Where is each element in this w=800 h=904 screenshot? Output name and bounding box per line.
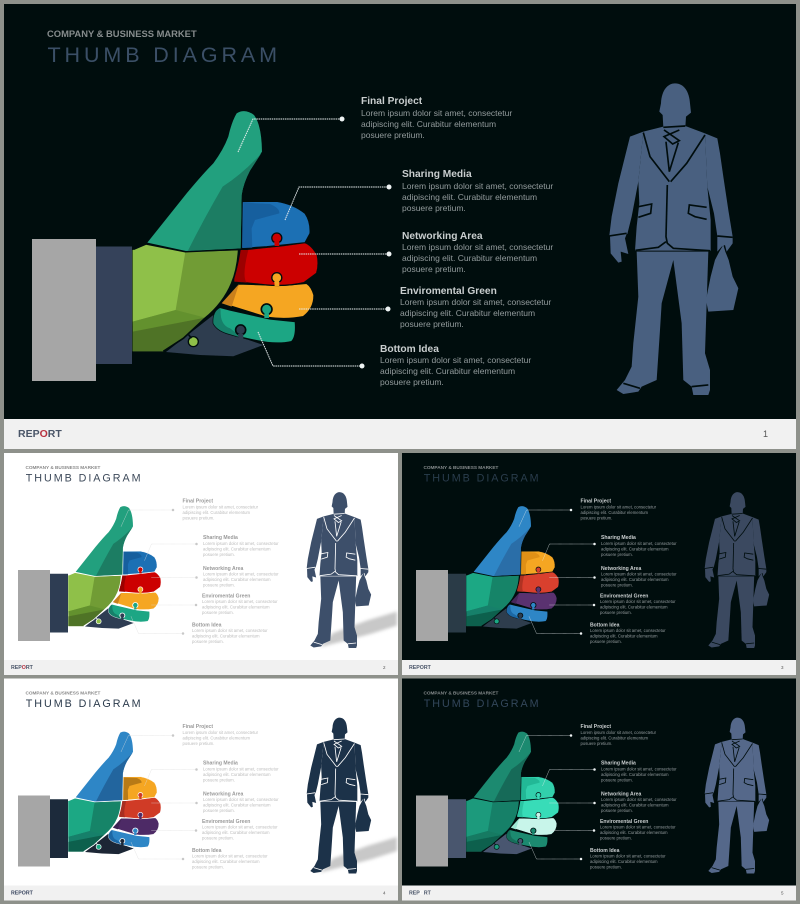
footer bar bbox=[4, 886, 398, 900]
callouts: posuere pretium. bbox=[203, 778, 235, 782]
businessman silhouette bbox=[705, 718, 769, 873]
callouts: Enviromental Green bbox=[600, 819, 648, 825]
callouts: adipiscing elit. Curabitur elementum bbox=[192, 634, 260, 638]
businessman silhouette bbox=[705, 492, 769, 648]
callouts: Lorem ipsum dolor sit amet, consectetur bbox=[203, 766, 279, 772]
icon: thumbs-up hand bbox=[18, 506, 161, 641]
callouts: Lorem ipsum dolor sit amet, consectetur bbox=[202, 599, 278, 604]
callouts: Lorem ipsum dolor sit amet, consectetur bbox=[192, 628, 268, 633]
callouts: adipiscing elit. Curabitur elementum bbox=[192, 859, 260, 864]
callout: enviromental green bbox=[299, 286, 551, 329]
callout: networking area: Lorem ipsum dolor sit amet, consectetur bbox=[402, 242, 553, 252]
callout: bottom idea bbox=[258, 332, 531, 387]
callouts: Bottom Idea bbox=[192, 848, 222, 854]
callouts: adipiscing elit. Curabitur elementum bbox=[580, 736, 649, 740]
callouts: Lorem ipsum dolor sit amet, consectetur bbox=[590, 628, 666, 633]
callouts: adipiscing elit. Curabitur elementum bbox=[601, 546, 669, 552]
businessman silhouette bbox=[307, 492, 371, 648]
callouts: Networking Area bbox=[601, 792, 641, 798]
callouts: adipiscing elit. Curabitur elementum bbox=[600, 604, 668, 610]
callout: final project: adipiscing elit. Curabitur elementum bbox=[361, 119, 496, 129]
callout: networking area: posuere pretium. bbox=[402, 264, 466, 274]
callout: bottom idea: Bottom Idea bbox=[380, 344, 439, 355]
callouts: Lorem ipsum dolor sit amet, consectetur bbox=[580, 504, 657, 510]
callouts bbox=[519, 498, 677, 644]
callouts: Final Project bbox=[182, 498, 213, 504]
callouts bbox=[519, 724, 677, 870]
callouts: posuere pretium. bbox=[601, 552, 633, 557]
icon: thumbs-up hand bbox=[416, 732, 559, 866]
callout: enviromental green: Lorem ipsum dolor sit amet, consectetur bbox=[400, 297, 551, 307]
title block: COMPANY & BUSINESS MARKET bbox=[47, 28, 197, 39]
panel: slide 5 dark bbox=[402, 678, 796, 900]
callout: bottom idea: posuere pretium. bbox=[380, 377, 444, 387]
callout: networking area: Networking Area bbox=[402, 231, 483, 242]
callout: bottom idea: adipiscing elit. Curabitur elementum bbox=[380, 366, 515, 376]
icon: thumbs-up hand bbox=[18, 732, 161, 866]
thumb bbox=[147, 111, 262, 251]
title block: THUMB DIAGRAM bbox=[424, 472, 540, 484]
callouts: Lorem ipsum dolor sit amet, consectetur bbox=[600, 599, 676, 604]
callouts: adipiscing elit. Curabitur elementum bbox=[601, 577, 669, 582]
callouts: posuere pretium. bbox=[203, 808, 235, 813]
callouts: Lorem ipsum dolor sit amet, consectetur bbox=[601, 541, 677, 546]
callout: networking area bbox=[299, 231, 553, 274]
footer bar: REPORT bbox=[409, 665, 432, 671]
callouts: Lorem ipsum dolor sit amet, consectetur bbox=[202, 824, 278, 830]
title block bbox=[26, 690, 142, 710]
callouts: Enviromental Green bbox=[600, 594, 648, 600]
callouts: adipiscing elit. Curabitur elementum bbox=[590, 634, 658, 638]
icon: thumbs-up hand bbox=[32, 111, 318, 381]
callouts: posuere pretium. bbox=[192, 864, 224, 870]
callouts: adipiscing elit. Curabitur elementum bbox=[580, 510, 649, 515]
callouts: posuere pretium. bbox=[600, 610, 632, 615]
footer bar: 3 bbox=[781, 665, 784, 670]
callouts: adipiscing elit. Curabitur elementum bbox=[202, 830, 270, 835]
callouts: posuere pretium. bbox=[203, 582, 235, 588]
callouts: posuere pretium. bbox=[203, 552, 235, 557]
panel: main slide bbox=[4, 4, 796, 449]
footer bar: 5 bbox=[781, 890, 784, 896]
callouts: posuere pretium. bbox=[580, 516, 612, 520]
callouts: Lorem ipsum dolor sit amet, consectetur bbox=[182, 504, 259, 510]
callouts: posuere pretium. bbox=[182, 741, 214, 746]
puzzle knob bbox=[188, 335, 198, 347]
callout: final project bbox=[238, 96, 512, 152]
footer bar bbox=[4, 419, 796, 449]
callout: bottom idea: Lorem ipsum dolor sit amet, consectetur bbox=[380, 355, 531, 365]
callout: enviromental green: posuere pretium. bbox=[400, 319, 464, 329]
callouts: Bottom Idea bbox=[590, 848, 620, 854]
callouts: Sharing Media bbox=[601, 760, 636, 766]
callouts: posuere pretium. bbox=[182, 516, 214, 520]
callouts: posuere pretium. bbox=[590, 864, 622, 870]
callouts: posuere pretium. bbox=[202, 610, 234, 615]
callouts: adipiscing elit. Curabitur elementum bbox=[203, 772, 271, 777]
callouts: Final Project bbox=[580, 724, 611, 730]
callouts: Lorem ipsum dolor sit amet, consectetur bbox=[203, 541, 279, 546]
finger: environmental green bbox=[222, 283, 314, 318]
footer bar: REPORT bbox=[409, 890, 432, 896]
callouts: Lorem ipsum dolor sit amet, consectetur bbox=[203, 797, 279, 802]
footer bar: 2 bbox=[383, 665, 386, 670]
callouts bbox=[121, 724, 279, 870]
callouts: posuere pretium. bbox=[601, 778, 633, 782]
callouts: Final Project bbox=[182, 724, 213, 730]
callout: enviromental green: Enviromental Green bbox=[400, 286, 497, 297]
palm bbox=[166, 315, 263, 356]
finger: sharing media bbox=[242, 201, 310, 248]
callouts: adipiscing elit. Curabitur elementum bbox=[590, 859, 658, 864]
businessman silhouette bbox=[609, 83, 738, 395]
callouts: Bottom Idea bbox=[192, 622, 222, 628]
callouts: Enviromental Green bbox=[202, 819, 250, 825]
footer bar: 4 bbox=[383, 890, 386, 896]
callouts: adipiscing elit. Curabitur elementum bbox=[182, 736, 251, 740]
callouts: adipiscing elit. Curabitur elementum bbox=[601, 802, 669, 808]
callouts: Lorem ipsum dolor sit amet, consectetur bbox=[580, 730, 657, 735]
callouts: Sharing Media bbox=[203, 760, 238, 766]
panel: slide 2 light bbox=[4, 453, 398, 675]
callout: sharing media: Lorem ipsum dolor sit amet, consectetur bbox=[402, 181, 553, 191]
callouts: Sharing Media bbox=[203, 535, 238, 541]
callout: sharing media: adipiscing elit. Curabitur elementum bbox=[402, 192, 537, 202]
callouts: posuere pretium. bbox=[580, 741, 612, 746]
callout: sharing media: Sharing Media bbox=[402, 169, 472, 180]
callouts: Lorem ipsum dolor sit amet, consectetur bbox=[601, 797, 677, 802]
footer bar: REPORT bbox=[11, 890, 34, 896]
callouts: Lorem ipsum dolor sit amet, consectetur bbox=[192, 854, 268, 858]
callout: sharing media: posuere pretium. bbox=[402, 203, 466, 213]
footer bar bbox=[4, 660, 398, 675]
callout: final project: posuere pretium. bbox=[361, 130, 425, 140]
callouts: adipiscing elit. Curabitur elementum bbox=[203, 802, 271, 808]
title block: THUMB DIAGRAM bbox=[26, 698, 142, 710]
title block bbox=[424, 690, 540, 710]
callouts: Lorem ipsum dolor sit amet, consectetur bbox=[590, 854, 666, 858]
finger: bottom idea bbox=[213, 307, 296, 343]
callout: networking area: adipiscing elit. Curabitur elementum bbox=[402, 253, 537, 263]
title block bbox=[47, 28, 281, 67]
title block: COMPANY & BUSINESS MARKET bbox=[26, 465, 100, 470]
title block: COMPANY & BUSINESS MARKET bbox=[424, 690, 498, 696]
footer bar: REPORT bbox=[11, 665, 34, 671]
callouts: Networking Area bbox=[203, 792, 243, 798]
callouts: Lorem ipsum dolor sit amet, consectetur bbox=[601, 572, 677, 576]
callout: final project: Lorem ipsum dolor sit amet, consectetur bbox=[361, 108, 512, 118]
title block: COMPANY & BUSINESS MARKET bbox=[26, 690, 100, 696]
callouts: Bottom Idea bbox=[590, 622, 620, 628]
finger: networking area bbox=[234, 243, 318, 286]
sleeve and cuff bbox=[32, 239, 132, 381]
icon: thumbs-up hand bbox=[416, 506, 559, 641]
callouts: posuere pretium. bbox=[600, 836, 632, 840]
footer bar bbox=[402, 886, 796, 900]
title block bbox=[26, 465, 142, 484]
title block: THUMB DIAGRAM bbox=[424, 698, 540, 710]
callouts: Lorem ipsum dolor sit amet, consectetur bbox=[601, 766, 677, 772]
title block: THUMB DIAGRAM bbox=[26, 472, 142, 484]
callouts: Final Project bbox=[580, 498, 611, 504]
callouts: posuere pretium. bbox=[601, 808, 633, 813]
footer bar: 1 bbox=[763, 429, 768, 439]
callouts: Networking Area bbox=[601, 566, 641, 572]
man shadow bbox=[320, 837, 397, 872]
callouts: posuere pretium. bbox=[202, 836, 234, 840]
callouts: posuere pretium. bbox=[192, 639, 224, 644]
callouts: Enviromental Green bbox=[202, 594, 250, 600]
callouts: Networking Area bbox=[203, 566, 243, 572]
callouts: adipiscing elit. Curabitur elementum bbox=[203, 546, 271, 552]
callouts: adipiscing elit. Curabitur elementum bbox=[601, 772, 669, 777]
panel: slide 4 light bbox=[4, 678, 398, 900]
callout: sharing media bbox=[285, 169, 553, 220]
callouts: Sharing Media bbox=[601, 535, 636, 541]
callout: enviromental green: adipiscing elit. Curabitur elementum bbox=[400, 308, 535, 318]
man shadow bbox=[320, 612, 397, 647]
callouts bbox=[121, 498, 279, 644]
callouts: adipiscing elit. Curabitur elementum bbox=[203, 577, 271, 582]
footer bar: REPORT bbox=[18, 428, 62, 440]
title block: THUMB DIAGRAM bbox=[48, 43, 281, 67]
callouts: adipiscing elit. Curabitur elementum bbox=[202, 604, 270, 610]
callouts: Lorem ipsum dolor sit amet, consectetur bbox=[600, 824, 676, 830]
fist bbox=[133, 244, 240, 351]
callouts: Lorem ipsum dolor sit amet, consectetur bbox=[182, 730, 259, 735]
callouts: adipiscing elit. Curabitur elementum bbox=[182, 510, 251, 515]
footer bar bbox=[402, 660, 796, 675]
callouts: posuere pretium. bbox=[590, 639, 622, 644]
callouts: adipiscing elit. Curabitur elementum bbox=[600, 830, 668, 835]
callouts: Lorem ipsum dolor sit amet, consectetur bbox=[203, 572, 279, 576]
title block: COMPANY & BUSINESS MARKET bbox=[424, 465, 498, 470]
callouts: posuere pretium. bbox=[601, 582, 633, 588]
panel: slide 3 dark bbox=[402, 453, 796, 675]
callout: final project: Final Project bbox=[361, 96, 423, 107]
title block bbox=[424, 465, 540, 484]
businessman silhouette bbox=[307, 718, 371, 873]
